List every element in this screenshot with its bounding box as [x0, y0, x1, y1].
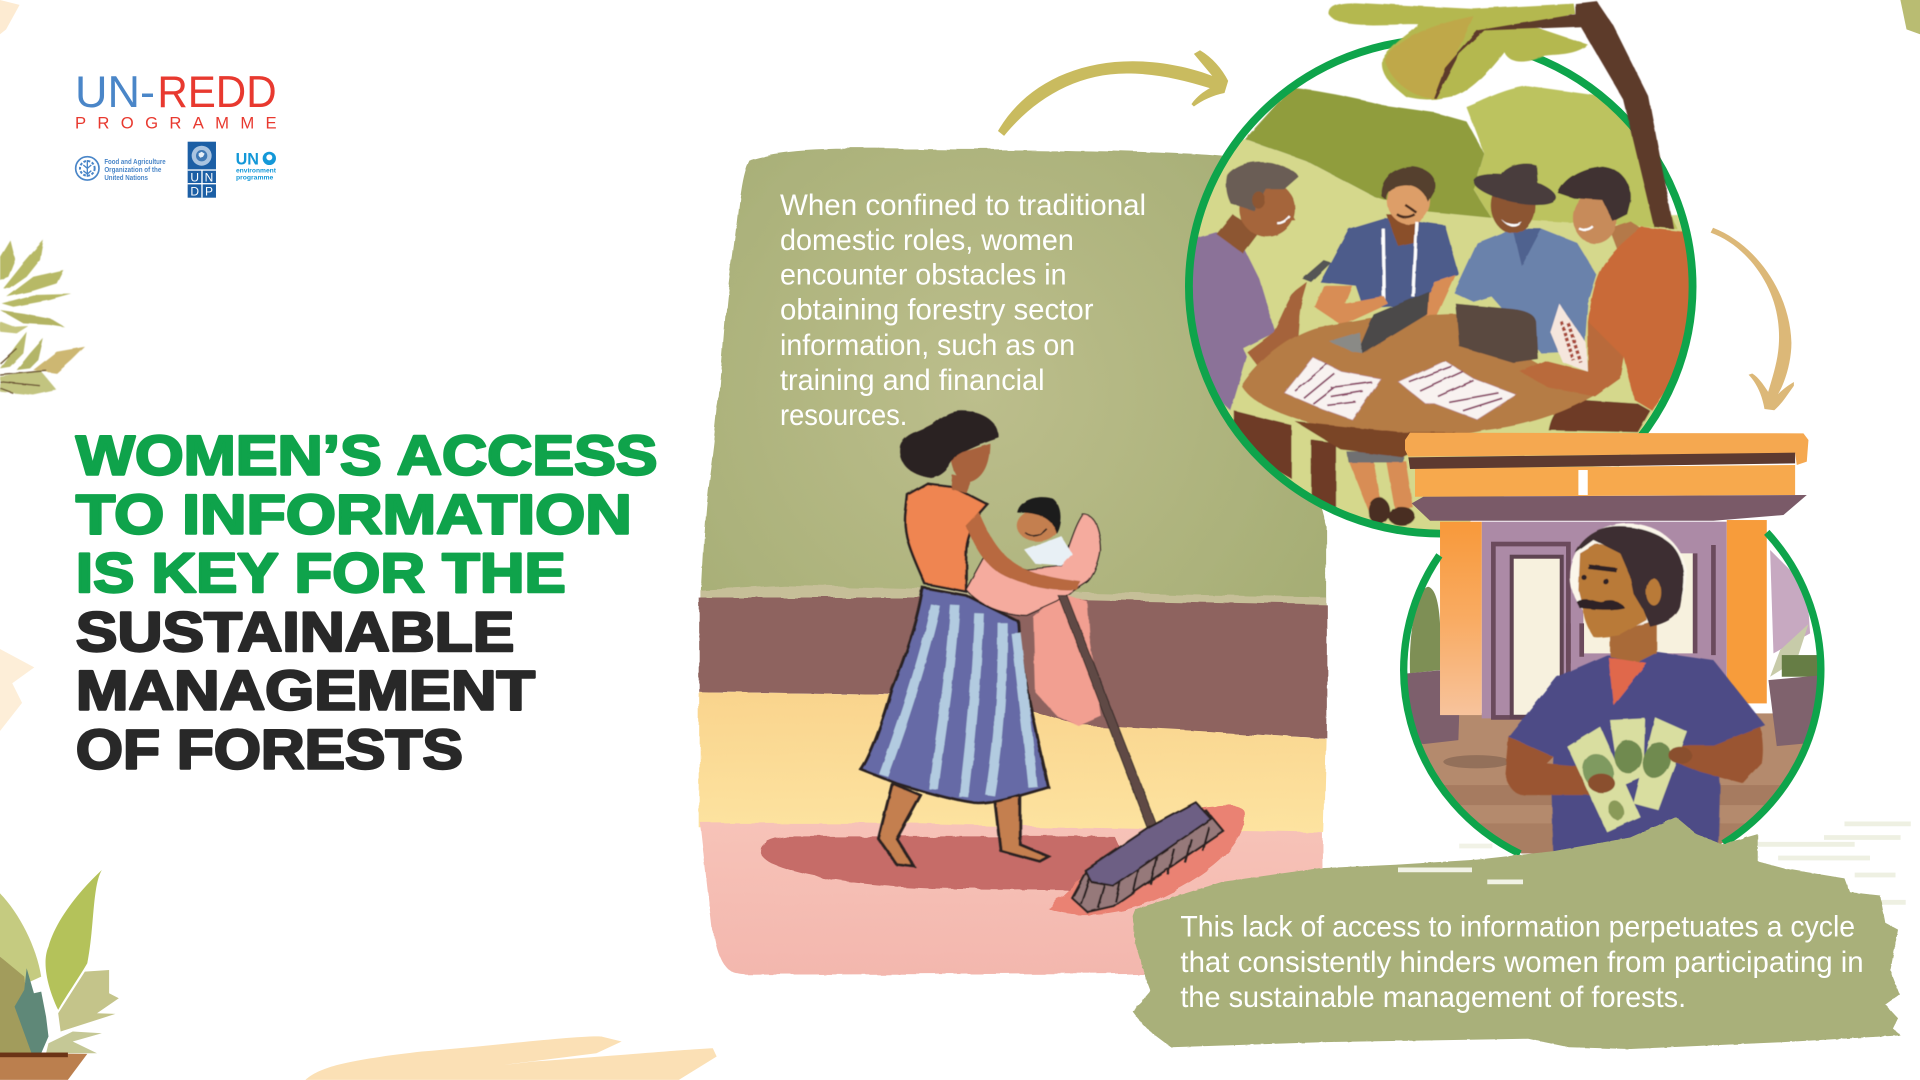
text block: domestic roles: When confined to traditional	[780, 189, 1146, 222]
arrow: to meeting scene	[998, 50, 1228, 136]
panel: text brush block	[1133, 817, 1911, 1049]
head	[900, 411, 999, 493]
wall base stripe	[700, 585, 1326, 610]
UNDP logo: D	[190, 184, 199, 198]
table legs	[1234, 400, 1650, 514]
text block: domestic roles: resources.	[780, 399, 907, 432]
scene clipped to circle	[1192, 85, 1689, 530]
man in orange shirt	[1520, 166, 1699, 411]
hill shadow	[1245, 88, 1491, 218]
UN-REDD wordmark: UN-	[75, 68, 155, 117]
man in light blue shirt and hat	[1454, 164, 1597, 354]
arms	[1505, 737, 1613, 795]
laptops	[1329, 291, 1538, 363]
icon: potted plant bottom left	[0, 870, 119, 1080]
roof	[1405, 433, 1808, 521]
table	[1242, 313, 1593, 434]
panel: meeting scene circle	[1185, 0, 1696, 538]
title: MANAGEMENT	[76, 659, 535, 722]
man with moustache	[1505, 523, 1765, 857]
title: TO INFORMATION	[76, 482, 632, 545]
FAO logo: Organization of the	[104, 167, 161, 174]
hanging cloth	[1033, 594, 1101, 726]
shirt	[1508, 652, 1765, 857]
white backing below roof	[1407, 466, 1818, 854]
text block: cycle: This lack of access to information perpetuates a cycle	[1180, 911, 1855, 944]
legs	[878, 783, 1048, 866]
title: IS KEY FOR THE	[76, 541, 566, 604]
title	[76, 423, 658, 780]
arm	[966, 512, 1081, 590]
left potted plant	[1407, 586, 1460, 744]
skirt	[861, 588, 1048, 803]
FAO logo: United Nations	[104, 175, 148, 182]
title: WOMEN’S ACCESS	[76, 423, 658, 486]
man's legs under table	[1347, 452, 1415, 525]
head halo	[1570, 523, 1687, 630]
floor and steps	[1420, 713, 1810, 853]
open books	[1284, 357, 1516, 420]
tree trunk and branch	[1434, 1, 1674, 229]
UN-REDD wordmark	[75, 68, 277, 132]
paint stroke bottom	[305, 1036, 717, 1080]
wall	[700, 149, 1326, 606]
green ring of meeting circle	[1189, 39, 1693, 534]
hair	[1575, 526, 1684, 627]
yellow floor	[699, 692, 1326, 833]
orange top	[905, 484, 988, 592]
baby	[1017, 497, 1072, 566]
illustration: woman sweeping with baby	[861, 411, 1223, 912]
text block: cycle: the sustainable management of forests.	[1180, 981, 1686, 1014]
arrow: to man with money	[1711, 228, 1794, 410]
pink floor	[700, 823, 1322, 975]
text block: domestic roles: training and financial	[780, 364, 1044, 397]
purple side wall	[1770, 550, 1810, 653]
title: OF FORESTS	[76, 717, 463, 780]
UN-REDD wordmark: PROGRAMME	[75, 113, 277, 132]
pillars	[1440, 520, 1767, 715]
text block: domestic roles	[780, 189, 1146, 432]
tree canopy	[1329, 3, 1588, 99]
UN environment programme logo: environment	[236, 167, 277, 174]
icon: palm leaves on left edge	[0, 240, 85, 395]
face	[1578, 543, 1647, 637]
UN environment programme logo: programme	[236, 175, 274, 182]
green ring of money circle	[1404, 532, 1821, 854]
right potted plant	[1768, 624, 1818, 746]
text block: domestic roles: domestic roles, women	[780, 224, 1074, 257]
dado band	[699, 598, 1327, 738]
man in purple shirt	[1191, 162, 1331, 411]
baby sling	[966, 514, 1100, 615]
man in dark blue shirt	[1315, 166, 1459, 330]
UN environment programme logo	[236, 149, 277, 182]
title: SUSTAINABLE	[76, 600, 514, 663]
panel: domestic scene background	[699, 149, 1327, 975]
UNDP logo	[188, 142, 216, 198]
text block: cycle	[1180, 911, 1864, 1014]
FAO logo: Food and Agriculture	[104, 159, 166, 166]
text block: cycle: that consistently hinders women from participating in	[1180, 946, 1864, 979]
UNDP logo: N	[205, 170, 213, 184]
ground	[1198, 138, 1682, 530]
text block: domestic roles: encounter obstacles in	[780, 259, 1067, 292]
broom	[1058, 596, 1223, 912]
UNDP logo: U	[190, 170, 199, 184]
moustache	[1577, 599, 1625, 610]
doorway wall	[1482, 522, 1727, 718]
FAO logo	[76, 157, 166, 182]
text block: domestic roles: information, such as on	[780, 329, 1075, 362]
decorative paint corners	[0, 0, 1920, 731]
floor shadow	[760, 805, 1244, 915]
banknotes	[1567, 717, 1692, 832]
UN environment programme logo: UN	[236, 149, 259, 168]
logo block	[75, 68, 277, 198]
panel: man with money circle	[1400, 432, 1824, 856]
UN-REDD wordmark: REDD	[157, 68, 277, 117]
UNDP logo: P	[205, 184, 213, 198]
text block: domestic roles: obtaining forestry sector	[780, 294, 1093, 327]
